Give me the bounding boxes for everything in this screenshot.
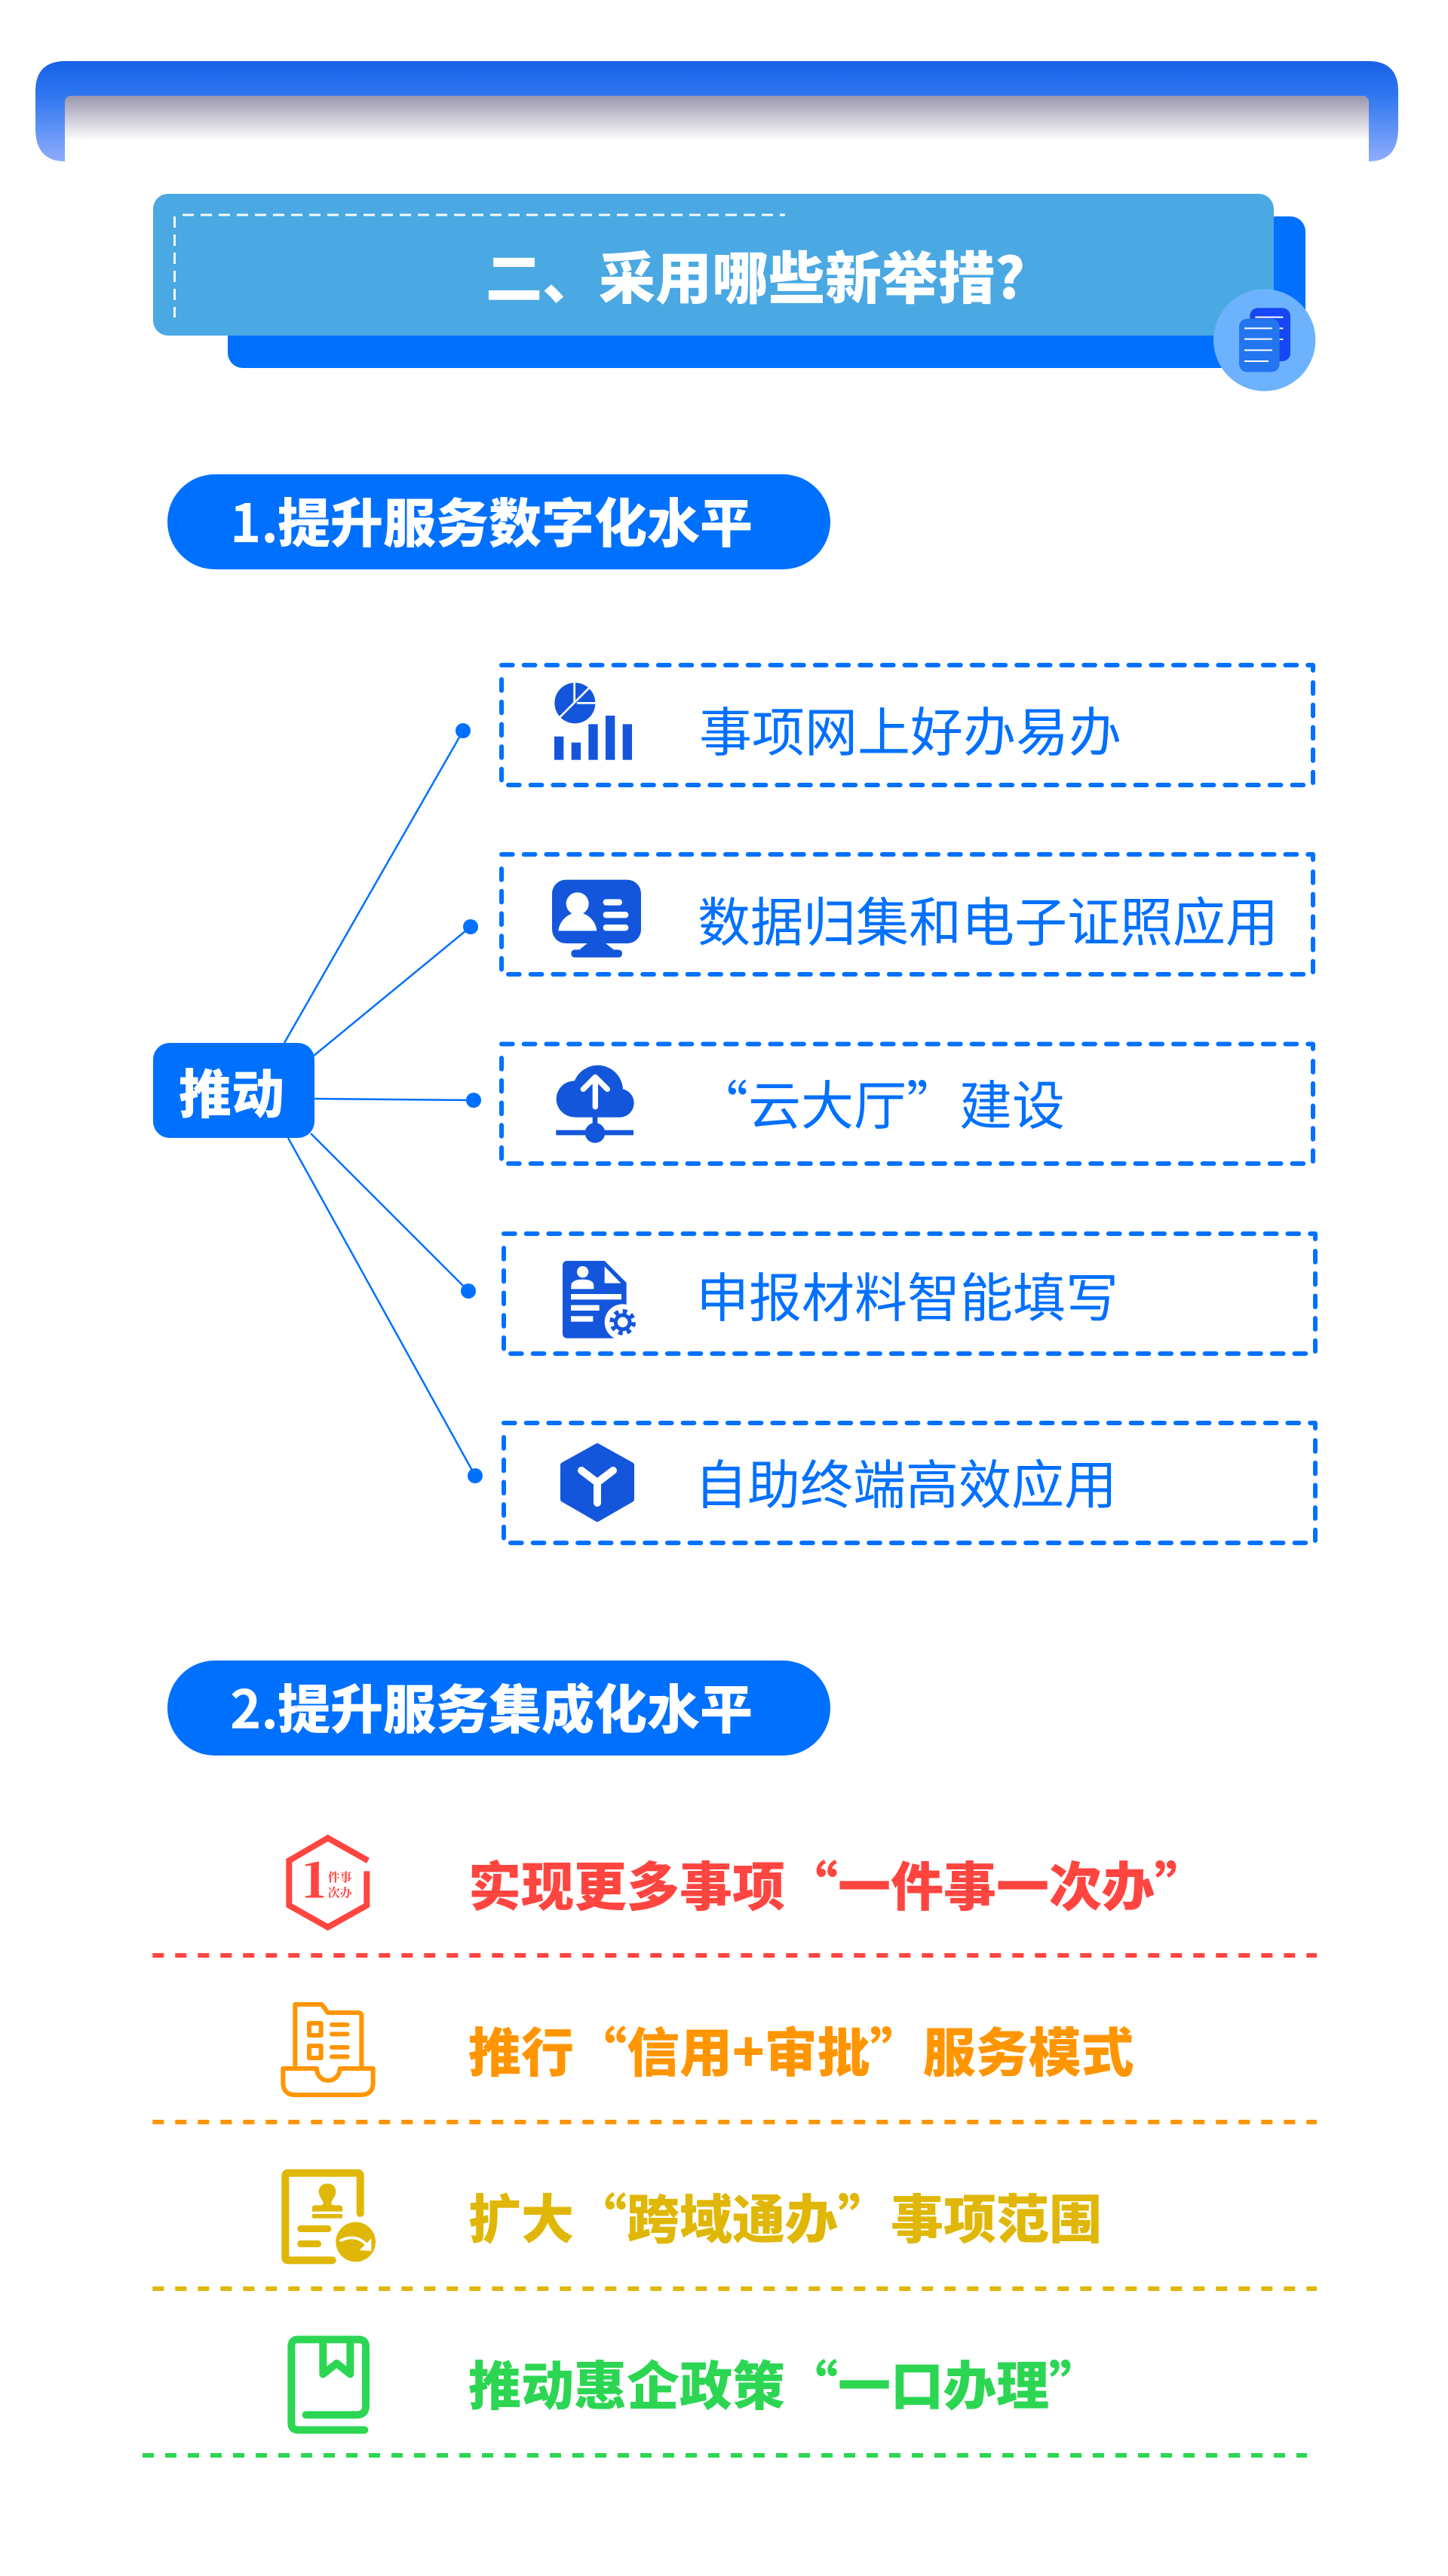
row 1: 一件事一次办 <box>289 1838 1207 1927</box>
icon: monitor with person <box>552 880 641 958</box>
divider 2 <box>152 2120 1317 2124</box>
icon: hexagon <box>563 1446 631 1519</box>
section heading 2 <box>167 1661 830 1756</box>
row text: 推动惠企政策“一口办理” <box>468 2344 1102 2421</box>
icon: hexagon badge <box>289 1838 368 1927</box>
icon: pie and bars <box>554 681 632 760</box>
label: 申报材料智能填写 <box>696 1256 1118 1332</box>
icon: cloud upload <box>556 1066 634 1143</box>
row 2: 信用+审批 <box>283 2004 1134 2095</box>
label: “云大厅”建设 <box>695 1064 1065 1140</box>
divider 4 <box>143 2453 1307 2458</box>
icon: hexagon badge: 1 <box>303 1844 325 1912</box>
icon: documents <box>1213 289 1315 391</box>
row 4: 一口办理 <box>291 2339 1102 2430</box>
row text: 实现更多事项“一件事一次办” <box>468 1845 1207 1921</box>
title text: 二、采用哪些新举措? <box>486 233 1025 315</box>
row text: 扩大“跨域通办”事项范围 <box>468 2178 1102 2254</box>
row 3: 跨域通办 <box>285 2173 1102 2262</box>
divider 3 <box>152 2286 1317 2291</box>
icon: stamped document <box>285 2173 376 2262</box>
section heading 1 <box>167 474 830 569</box>
section heading 2: 2.提升服务集成化水平 <box>230 1668 753 1744</box>
divider 1 <box>152 1953 1317 1958</box>
banner dashed corner <box>175 215 785 317</box>
icon: bookmark book <box>291 2339 366 2430</box>
icon: hexagon badge: 件事 <box>328 1868 352 1885</box>
label: 事项网上好办易办 <box>699 691 1121 767</box>
root node: 推动: 推动 <box>179 1053 284 1129</box>
item box 5 <box>504 1423 1315 1543</box>
icon: folder tray <box>283 2004 373 2095</box>
section heading 1: 1.提升服务数字化水平 <box>230 482 753 558</box>
title banner <box>153 194 1315 391</box>
item box 2 <box>502 854 1313 974</box>
connector lines <box>284 723 483 1483</box>
root node: 推动 <box>153 1043 314 1138</box>
label: 自助终端高效应用 <box>695 1443 1117 1520</box>
item box 1 <box>502 665 1313 785</box>
row text: 推行“信用+审批”服务模式 <box>468 2011 1134 2087</box>
label: 数据归集和电子证照应用 <box>698 881 1278 957</box>
banner front panel <box>153 194 1274 336</box>
item box 4 <box>504 1234 1315 1354</box>
icon: hexagon badge: 次办 <box>328 1883 354 1900</box>
header bar <box>35 61 1398 161</box>
banner back panel <box>228 216 1305 368</box>
icon: document with gear <box>563 1261 641 1340</box>
item box 3 <box>502 1044 1313 1164</box>
